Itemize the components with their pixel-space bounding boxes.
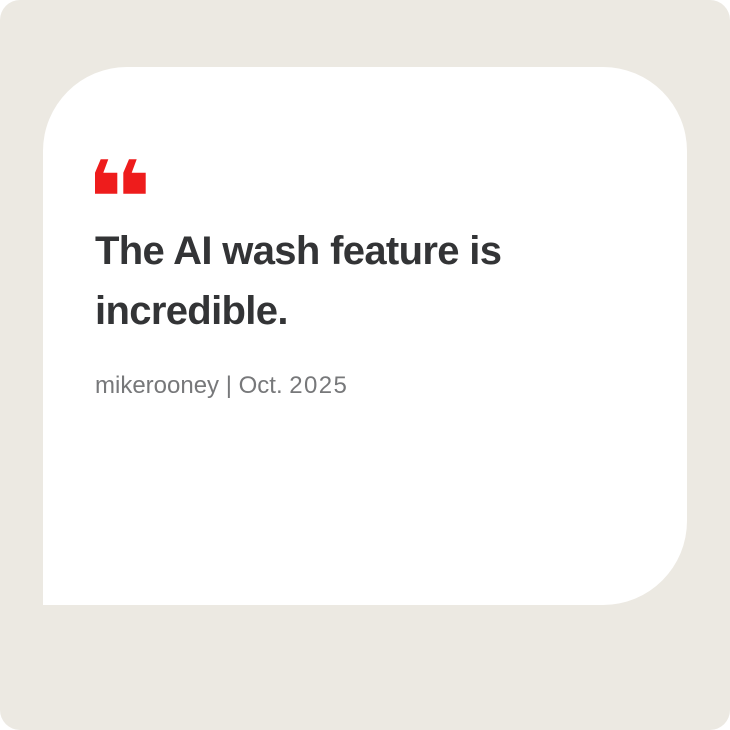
panel: quote card [43, 67, 687, 605]
text: author and date: mikerooney | Oct. 2025 [95, 372, 348, 399]
heading: quote text [95, 229, 501, 333]
heading: quote text: incredible. [95, 289, 288, 333]
icon: red quotation mark [95, 159, 146, 194]
heading: quote text: The AI wash feature is [95, 229, 501, 273]
